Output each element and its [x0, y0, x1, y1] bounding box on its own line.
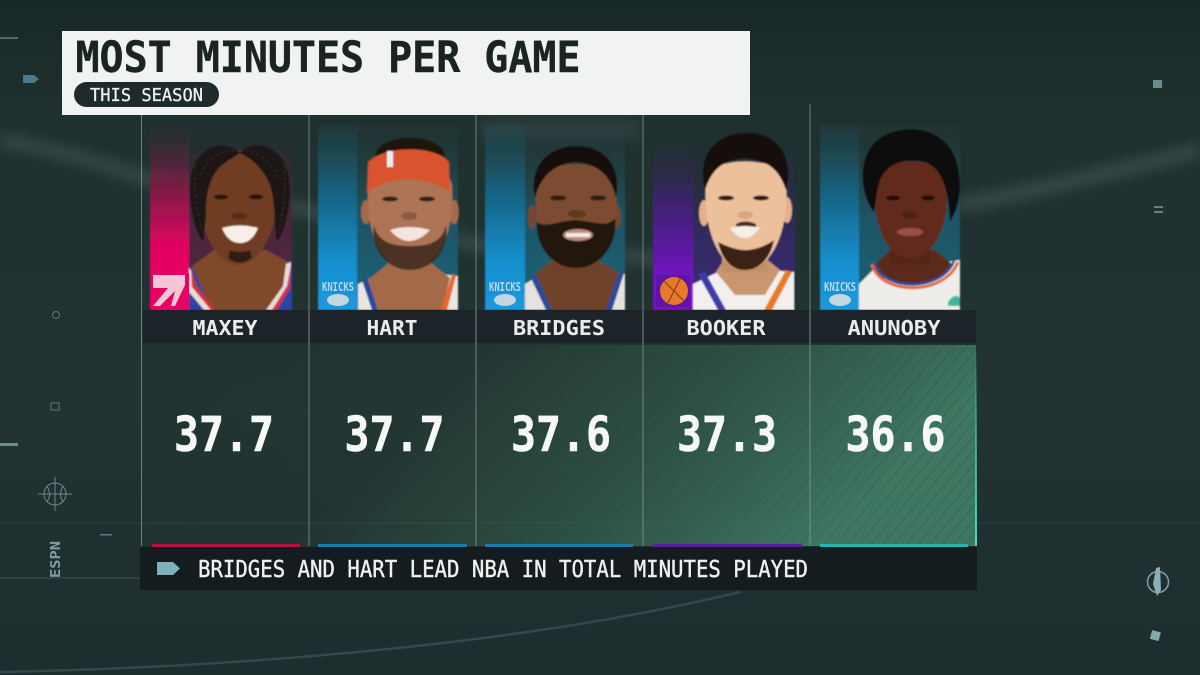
name bar: Hart: [310, 310, 475, 343]
name: Maxey: MAXEY: [192, 316, 258, 340]
team color bar: Hart: [318, 544, 467, 547]
team logo: Knicks: [489, 280, 521, 306]
title: MOST MINUTES PER GAME: [76, 34, 580, 83]
team color bar: Booker: [653, 544, 802, 547]
player card: Bridges: [477, 125, 642, 547]
subtitle pill: [74, 82, 219, 107]
name bar: Anunoby: [811, 310, 976, 343]
team color bar: Anunoby: [820, 544, 968, 547]
team logo: 76ers: [151, 273, 189, 310]
team logo: Suns: [656, 275, 690, 307]
photo: Hart: [318, 125, 459, 310]
title panel: [62, 31, 750, 115]
value: Hart: 37.7: [344, 407, 444, 463]
footnote text: BRIDGES AND HART LEAD NBA IN TOTAL MINUTES PLAYED: [198, 557, 808, 583]
photo: Maxey: [150, 125, 292, 310]
team color bar: Maxey: [152, 544, 300, 547]
value: Bridges: 37.6: [511, 407, 611, 463]
team logo: Knicks: KNICKS: [489, 280, 521, 294]
player card: Maxey: [143, 125, 308, 547]
name: Booker: BOOKER: [686, 316, 766, 340]
player card: Booker: [644, 133, 809, 547]
team logo: Knicks: [322, 280, 354, 306]
name: Bridges: BRIDGES: [513, 316, 605, 340]
name bar: Bridges: [477, 310, 642, 343]
name bar: Maxey: [143, 310, 308, 343]
team logo: Knicks: KNICKS: [824, 280, 856, 294]
value: Booker: 37.3: [677, 407, 777, 463]
value: Maxey: 37.7: [174, 407, 274, 463]
name: Anunoby: ANUNOBY: [848, 316, 941, 340]
team logo: Knicks: [824, 280, 856, 306]
photo: Bridges: [485, 125, 625, 310]
chart area background: [141, 104, 977, 546]
team color bar: Bridges: [485, 544, 633, 547]
decorative side icons: ESPN: [49, 541, 64, 578]
name bar: Booker: [644, 310, 809, 343]
arrow tag icon: [157, 562, 180, 575]
value: Anunoby: 36.6: [846, 407, 946, 463]
player card: Anunoby: [811, 125, 976, 547]
player card: Hart: [310, 125, 475, 547]
team logo: Knicks: KNICKS: [322, 280, 354, 294]
photo: Booker: [653, 133, 795, 310]
subtitle pill: THIS SEASON: [90, 85, 203, 106]
photo: Anunoby: [820, 125, 960, 310]
footnote bar: [140, 547, 977, 590]
name: Hart: HART: [366, 316, 418, 340]
